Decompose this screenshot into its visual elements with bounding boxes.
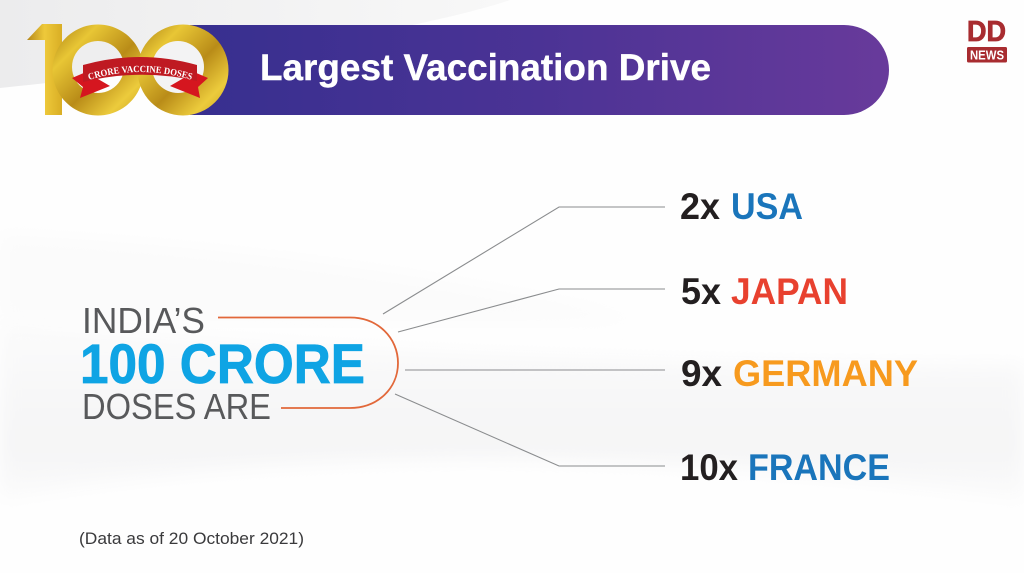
connector lines (383, 207, 665, 466)
DD News logo: DD (967, 16, 1006, 48)
first zero ring (53, 24, 144, 116)
comparison: France: FRANCE (748, 447, 890, 488)
comparison: USA (680, 186, 803, 227)
comparison: France (680, 447, 890, 488)
comparison: Germany: GERMANY (733, 353, 918, 394)
digit one (27, 24, 62, 115)
comparison: USA: USA (731, 186, 803, 227)
comparison: Germany: 9x (681, 353, 722, 394)
news badge (967, 47, 1007, 62)
doses are: DOSES ARE (82, 386, 271, 427)
left statement (80, 300, 365, 427)
comparison: France: 10x (680, 447, 738, 488)
comparison: Japan (681, 271, 848, 312)
comparison: USA: 2x (680, 186, 720, 227)
comparison: Japan: 5x (681, 271, 721, 312)
100 crore vaccine doses logo (27, 24, 228, 116)
ribbon text: CRORE VACCINE DOSES (88, 66, 192, 80)
100 crore highlight: 100 CRORE (80, 332, 365, 395)
banner title text: Largest Vaccination Drive (260, 47, 711, 88)
title banner (190, 25, 889, 115)
data date note: (Data as of 20 October 2021) (79, 530, 304, 548)
left statement: INDIA’S (82, 300, 205, 341)
orange bracket (218, 318, 398, 408)
red ribbon (72, 57, 208, 98)
DD News logo (967, 16, 1007, 62)
comparison: Japan: JAPAN (731, 271, 848, 312)
DD News logo: NEWS (970, 48, 1004, 62)
second zero ring (138, 24, 228, 116)
